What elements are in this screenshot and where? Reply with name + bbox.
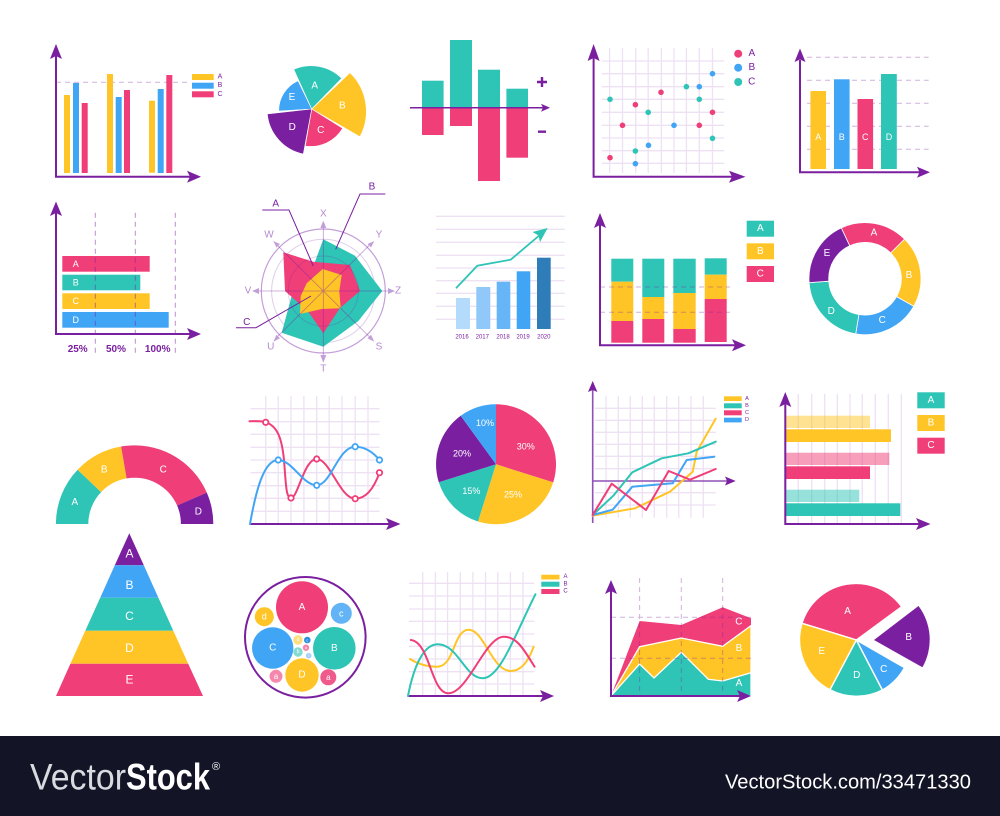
chart: stacked area: B — [736, 643, 743, 654]
chart: stacked area: A — [736, 678, 743, 689]
chart: packed bubbles: a — [326, 673, 331, 682]
chart: half donut — [56, 445, 213, 524]
footer logo: Stock — [126, 756, 210, 798]
chart: stacked bars: C — [757, 268, 764, 280]
chart: radar: Y — [376, 230, 383, 240]
chart: smooth lines with markers — [250, 396, 400, 530]
chart: horizontal percent bars: C — [72, 296, 79, 306]
chart: scatter plot: A — [748, 48, 755, 59]
chart: rose pie: C — [317, 125, 324, 136]
chart: growth bars with arrow: 2019 — [516, 334, 530, 340]
chart: stacked area: C — [735, 616, 743, 628]
chart: three smooth curves: A — [563, 574, 568, 580]
chart: packed bubbles: B — [331, 643, 338, 654]
chart: grouped bars: C — [217, 91, 223, 98]
chart: radar: C — [243, 317, 250, 328]
chart: bars with dashed guides: B — [839, 132, 845, 142]
chart: multi line: B — [745, 403, 749, 409]
chart: packed bubbles: a — [274, 672, 279, 681]
chart: multi line: A — [745, 396, 749, 402]
chart: horizontal percent bars: 25% — [68, 344, 88, 355]
chart: stacked bars — [594, 213, 774, 351]
chart: stacked bars: A — [757, 223, 764, 234]
chart: positive negative bars — [410, 40, 550, 181]
chart: rose pie: B — [339, 100, 346, 112]
chart: horizontal percent bars: 100% — [145, 344, 171, 355]
chart: horizontal percent bars — [50, 202, 201, 357]
chart: stacked bars: B — [757, 246, 764, 257]
chart: donut: A — [871, 228, 878, 238]
chart: packed bubbles: d — [262, 612, 267, 622]
chart: grouped bars: A — [218, 74, 223, 80]
chart: scatter plot — [588, 44, 755, 183]
chart: scatter plot: C — [748, 76, 755, 88]
chart: pyramid — [56, 533, 203, 696]
chart: stacked area — [605, 578, 751, 702]
chart: packed bubbles: c — [306, 638, 308, 642]
chart: rose pie: E — [289, 92, 296, 103]
chart: paired horizontal bars: C — [927, 440, 935, 451]
chart: grouped bars: B — [218, 82, 223, 89]
chart: growth bars with arrow: 2018 — [496, 334, 510, 340]
chart: pyramid: E — [125, 672, 134, 686]
chart: three smooth curves: B — [563, 581, 568, 587]
chart: radar: S — [376, 342, 383, 352]
chart: exploded pie: B — [905, 632, 912, 643]
chart: rose pie — [267, 66, 366, 154]
chart: bars with dashed guides: A — [815, 132, 821, 142]
chart: percent pie: 15% — [462, 486, 480, 496]
chart: horizontal percent bars: 50% — [106, 344, 126, 355]
chart: radar: T — [320, 364, 326, 374]
chart: radar: Z — [395, 286, 401, 296]
chart: radar: V — [245, 286, 252, 296]
chart: packed bubbles: c — [339, 608, 344, 618]
chart: exploded pie: D — [853, 670, 860, 681]
chart: packed bubbles — [245, 577, 366, 698]
chart: half donut: B — [101, 464, 108, 476]
chart: bars with dashed guides — [794, 48, 930, 178]
chart: multi line: C — [745, 410, 749, 416]
chart: packed bubbles: d — [297, 637, 300, 643]
chart: paired horizontal bars — [779, 392, 945, 530]
chart: pyramid: B — [125, 578, 134, 592]
chart: exploded pie: A — [844, 606, 851, 617]
chart: paired horizontal bars: A — [928, 395, 935, 406]
chart: horizontal percent bars: D — [72, 315, 79, 325]
chart: percent pie — [436, 404, 556, 524]
chart: grouped bars — [50, 44, 223, 183]
chart: rose pie: A — [311, 80, 318, 92]
chart: donut: B — [906, 270, 913, 281]
chart: donut — [809, 223, 921, 335]
chart: multi line — [588, 381, 749, 523]
chart: half donut: C — [160, 464, 167, 476]
chart: packed bubbles: a — [305, 645, 308, 650]
chart: half donut: A — [71, 497, 78, 508]
chart: half donut: D — [195, 506, 202, 518]
chart: radar: X — [320, 208, 327, 220]
chart: packed bubbles: c — [308, 654, 310, 658]
chart: pyramid: D — [125, 641, 134, 655]
chart: exploded pie — [800, 583, 930, 696]
chart: packed bubbles: C — [269, 642, 276, 654]
footer image id: VectorStock.com/33471330 — [725, 772, 971, 794]
chart: three smooth curves: C — [563, 588, 568, 594]
footer logo — [30, 756, 220, 798]
footer band — [0, 736, 1000, 816]
chart: pyramid: A — [125, 547, 134, 561]
chart: percent pie: 25% — [504, 489, 522, 499]
chart: packed bubbles: b — [297, 649, 300, 655]
chart: rose pie: D — [289, 122, 296, 133]
chart: exploded pie: E — [818, 646, 825, 657]
chart: growth bars with arrow: 2016 — [455, 334, 469, 340]
chart: growth bars with arrow: 2017 — [476, 334, 490, 340]
chart: growth bars with arrow — [436, 216, 565, 340]
chart: radar: B — [369, 182, 376, 192]
chart: percent pie: 30% — [517, 441, 535, 451]
chart: pyramid: C — [125, 609, 134, 623]
chart: scatter plot: B — [748, 62, 755, 73]
chart: donut: E — [824, 248, 831, 259]
chart: multi line: D — [745, 417, 749, 423]
chart: bars with dashed guides: C — [862, 132, 869, 142]
chart: paired horizontal bars: B — [928, 418, 935, 428]
chart: packed bubbles: A — [299, 602, 306, 613]
chart: percent pie: 10% — [476, 418, 494, 428]
footer logo: Vector — [30, 756, 126, 798]
chart: exploded pie: C — [880, 664, 887, 675]
chart: donut: D — [828, 306, 835, 317]
chart: percent pie: 20% — [453, 448, 471, 458]
chart: radar — [236, 182, 401, 374]
chart: packed bubbles: D — [298, 670, 306, 680]
chart: donut: C — [879, 315, 886, 326]
chart: radar: W — [264, 230, 274, 240]
chart: bars with dashed guides: D — [886, 132, 893, 142]
chart: three smooth curves — [408, 572, 568, 702]
footer logo: ® — [212, 761, 220, 773]
chart: growth bars with arrow: 2020 — [537, 334, 551, 340]
chart: horizontal percent bars: A — [73, 259, 79, 269]
chart: horizontal percent bars: B — [73, 278, 79, 288]
chart: radar: A — [272, 198, 279, 210]
chart: radar: U — [267, 342, 274, 352]
